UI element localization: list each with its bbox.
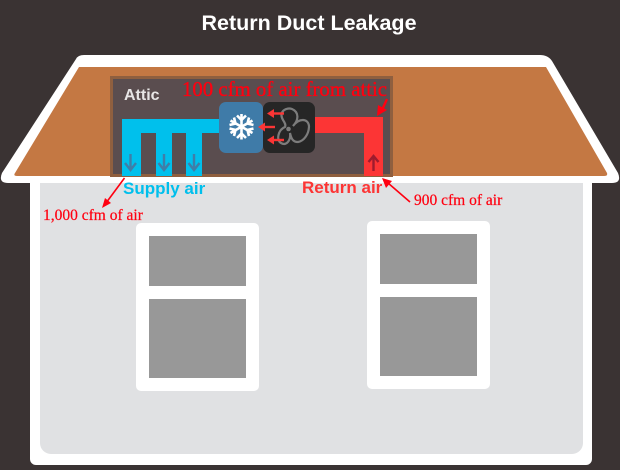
icon: fan — [258, 102, 315, 153]
arrow: supply callout — [102, 178, 124, 208]
window: right — [367, 221, 490, 389]
panel: attic — [112, 78, 392, 176]
arrow: attic leak — [377, 99, 387, 116]
title: Return Duct Leakage — [201, 11, 417, 35]
supply duct — [122, 119, 222, 176]
icon: cooling coil snowflake — [219, 102, 263, 153]
house body — [30, 165, 592, 465]
attic label: Attic — [124, 87, 160, 104]
roof — [1, 55, 619, 183]
return cfm label: 900 cfm of air — [414, 192, 503, 209]
supply air label: Supply air — [123, 179, 206, 198]
icon: supply arrows — [125, 154, 200, 170]
arrow: return callout — [382, 178, 410, 202]
supply cfm label: 1,000 cfm of air — [43, 207, 144, 224]
icon: return arrow — [368, 156, 378, 171]
leak callout text: 100 cfm of air from attic — [182, 78, 387, 101]
return duct — [312, 117, 383, 176]
icon: red airflow arrows — [258, 109, 284, 144]
window: left — [136, 223, 259, 391]
return air label: Return air — [302, 178, 383, 197]
